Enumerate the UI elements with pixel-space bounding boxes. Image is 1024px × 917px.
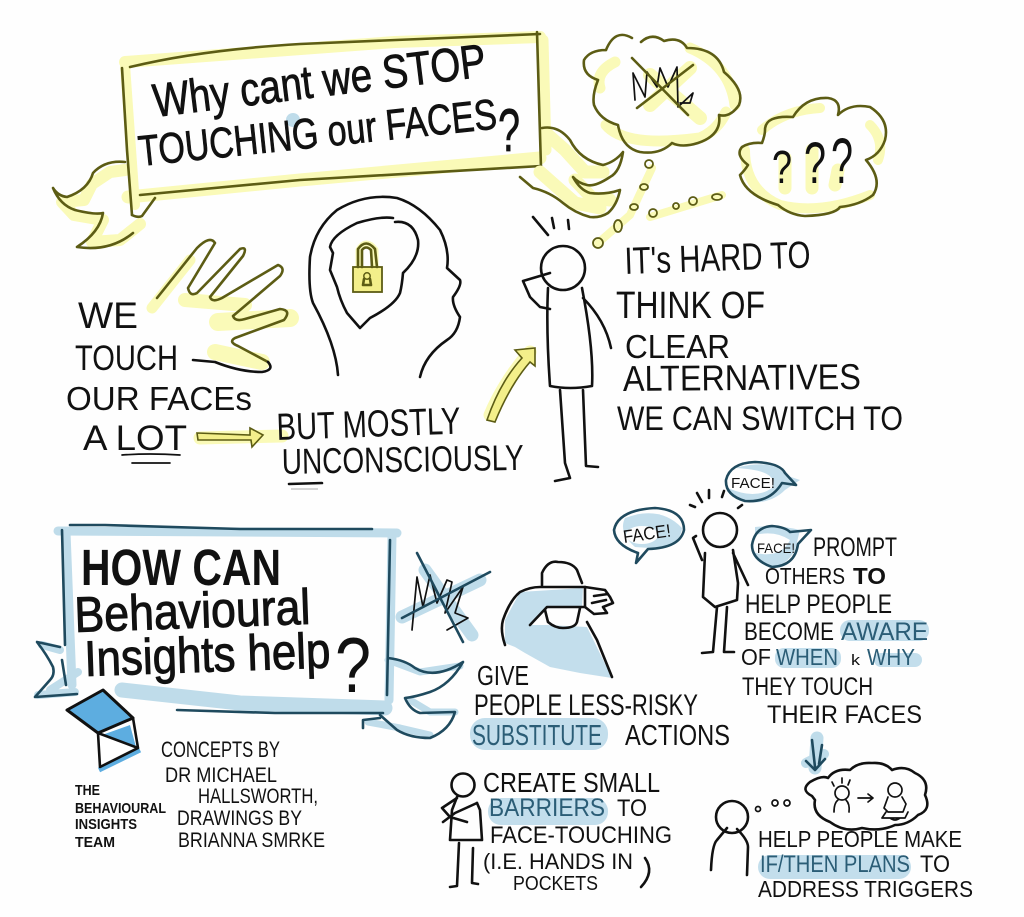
text: hard to think of alternatives: WE CAN SWITCH TO [617,400,903,438]
text: credits: CONCEPTS BY [161,737,280,762]
highlight: if/then plans [758,855,911,879]
icon: thought bubbles trail [593,160,722,248]
text: prompt others: k [851,652,861,669]
head [541,246,585,290]
text: hard to think of alternatives: IT's HARD TO [624,235,811,283]
arrow: to but mostly [197,428,282,447]
cloud outline [740,98,886,216]
highlight: why [874,653,922,667]
heading text: ? [335,621,371,709]
text: help people make if/then plans: ADDRESS TRIGGERS [758,876,973,902]
highlight: substitute [470,718,608,750]
text: give people substitute actions: SUBSTITUTE [472,720,602,752]
heading text [73,539,371,709]
text: prompt others: TO [853,563,886,589]
text: prompt others: BECOME [744,618,834,646]
text: prompt others: OTHERS [765,563,845,589]
heading text: HOW CAN [81,539,281,596]
text: create small barriers: CREATE SMALL [483,767,660,798]
meditating person [882,783,908,820]
icon: crossed-out hand [402,553,490,642]
question marks: ? [804,131,826,196]
thought dots [756,800,790,812]
title text: TOUCHING our FACES [136,91,499,176]
head [716,801,748,833]
text: we touch our faces a lot: TOUCH [75,339,178,378]
team name: TEAM [75,834,115,851]
hand outline [157,240,287,362]
left ribbon [35,642,77,697]
text: we touch our faces a lot: WE [78,295,138,336]
text: credits: DR MICHAEL [165,764,277,787]
text: create small barriers: TO [617,795,647,822]
text: help people make if/then plans [758,826,973,902]
speech bubble: face right: FACE! [757,540,795,556]
text: hard to think of alternatives: THINK OF [616,285,765,327]
box frame [62,525,390,713]
text: prompt others: THEY TOUCH [742,673,873,701]
title text: ? [498,97,520,164]
panel: title banner [53,32,623,248]
text: prompt others [741,532,929,729]
body and arm [547,288,611,388]
team name [75,782,166,851]
text: prompt others: OF [741,644,771,670]
excitement marks [690,490,742,508]
cloud outline [584,35,740,153]
text: give people substitute actions: PEOPLE LESS-RISKY [474,689,698,722]
folded arms [442,798,477,822]
speech bubble: face left: FACE! [622,520,672,547]
text: create small barriers: BARRIERS [489,794,605,822]
panel: how can behavioural insights help [35,525,463,738]
logo cube [67,690,140,770]
logo: behavioural insights team [67,690,166,851]
text: but mostly unconsciously: BUT MOSTLY [276,401,461,449]
text: prompt others: PROMPT [813,532,897,562]
shoulders [711,828,748,875]
banner highlight [62,37,546,242]
text: help people make if/then plans: TO [920,851,950,878]
speech bubble: face top: FACE! [731,475,775,492]
text: credits [161,737,325,852]
speech bubble: face top [726,462,800,502]
text: create small barriers: (I.E. HANDS IN [483,849,633,874]
hand scribble [412,575,468,630]
text: give people substitute actions: ACTIONS [625,720,730,752]
arm on head [523,273,550,309]
text: hard to think of alternatives: ALTERNATIVES [623,356,861,399]
text: create small barriers: POCKETS [513,873,598,895]
text: prompt others: HELP PEOPLE [745,589,892,619]
icon: head with locked brain [309,197,460,377]
text: prompt others: WHY [867,644,915,670]
text: prompt others: WHEN [776,644,838,670]
text: help people make if/then plans: IF/THEN PLANS [760,851,910,878]
legs [702,607,734,653]
text: create small barriers [483,767,672,895]
cross highlight [402,570,480,635]
head [703,513,737,547]
text: we touch our faces a lot: OUR FACEs [66,380,252,417]
head and arm outline [502,562,612,677]
heading text: Behavioural [73,579,311,643]
team name: THE [75,782,100,799]
arrow: up to person [487,348,535,422]
box highlight [38,531,460,735]
text: prompt others: THEIR FACES [767,701,922,729]
body [450,797,482,840]
brain outline [330,218,418,328]
question marks: ? [772,141,792,193]
figure: person thinking of if/then [711,763,927,875]
cross [402,553,490,642]
icon: thought cloud with question marks [740,98,886,216]
team name: BEHAVIOURAL [75,800,166,817]
icon: thought cloud with crossed hand [584,35,740,153]
highlight: when [775,648,841,668]
text: help people make if/then plans: HELP PEOPLE MAKE [758,826,962,852]
right ribbon [363,658,463,738]
text: we touch our faces a lot [66,295,252,463]
body and arms [693,536,748,607]
text: but mostly unconsciously [276,401,524,489]
figure: person with face bubbles [690,490,748,653]
text: credits: HALLSWORTH, [198,785,318,808]
legs [450,843,478,887]
text: hard to think of alternatives: CLEAR [625,328,730,365]
text: give people substitute actions: GIVE [477,660,529,691]
text: hard to think of alternatives [616,235,903,438]
text: we touch our faces a lot: A LOT [83,419,187,458]
text: credits: BRIANNA SMRKE [178,829,325,852]
cloud highlight [745,108,880,208]
heading text: Insights help [83,622,331,687]
head [452,774,474,796]
inner arrow [858,794,873,802]
title text [136,33,520,176]
highlight: barriers [488,798,608,825]
legs [555,390,598,481]
text: give people substitute actions [470,660,730,752]
body highlight [505,588,612,678]
text: create small barriers: FACE-TOUCHING [490,822,672,849]
speech bubble: face right [752,526,811,567]
arrow: down [806,738,825,770]
thought cloud [805,763,927,830]
text: credits: DRAWINGS BY [177,807,302,830]
hand [585,587,613,614]
left ribbon tail [53,162,155,248]
text: prompt others: AWARE [841,618,928,646]
highlight: aware [840,620,929,641]
figure: person covering face with arm [502,562,613,678]
cloud highlight [599,48,735,141]
right ribbon tail [520,128,623,217]
question marks: ? [831,125,853,197]
crossed-out hand [632,58,700,118]
title text: Why cant we STOP [150,33,489,127]
thinking marks [533,217,569,235]
figure: person with folded arms [442,774,482,887]
hand highlight [152,260,290,362]
icon: hand [152,240,290,372]
team name: INSIGHTS [75,816,137,833]
head outline [309,197,460,377]
question marks [772,125,853,197]
text: but mostly unconsciously: UNCONSCIOUSLY [281,437,524,482]
speech bubble: face left [614,508,684,563]
small person with marks [832,778,850,812]
figure: thinking person [523,217,611,481]
banner frame [122,32,541,215]
padlock [353,244,382,292]
